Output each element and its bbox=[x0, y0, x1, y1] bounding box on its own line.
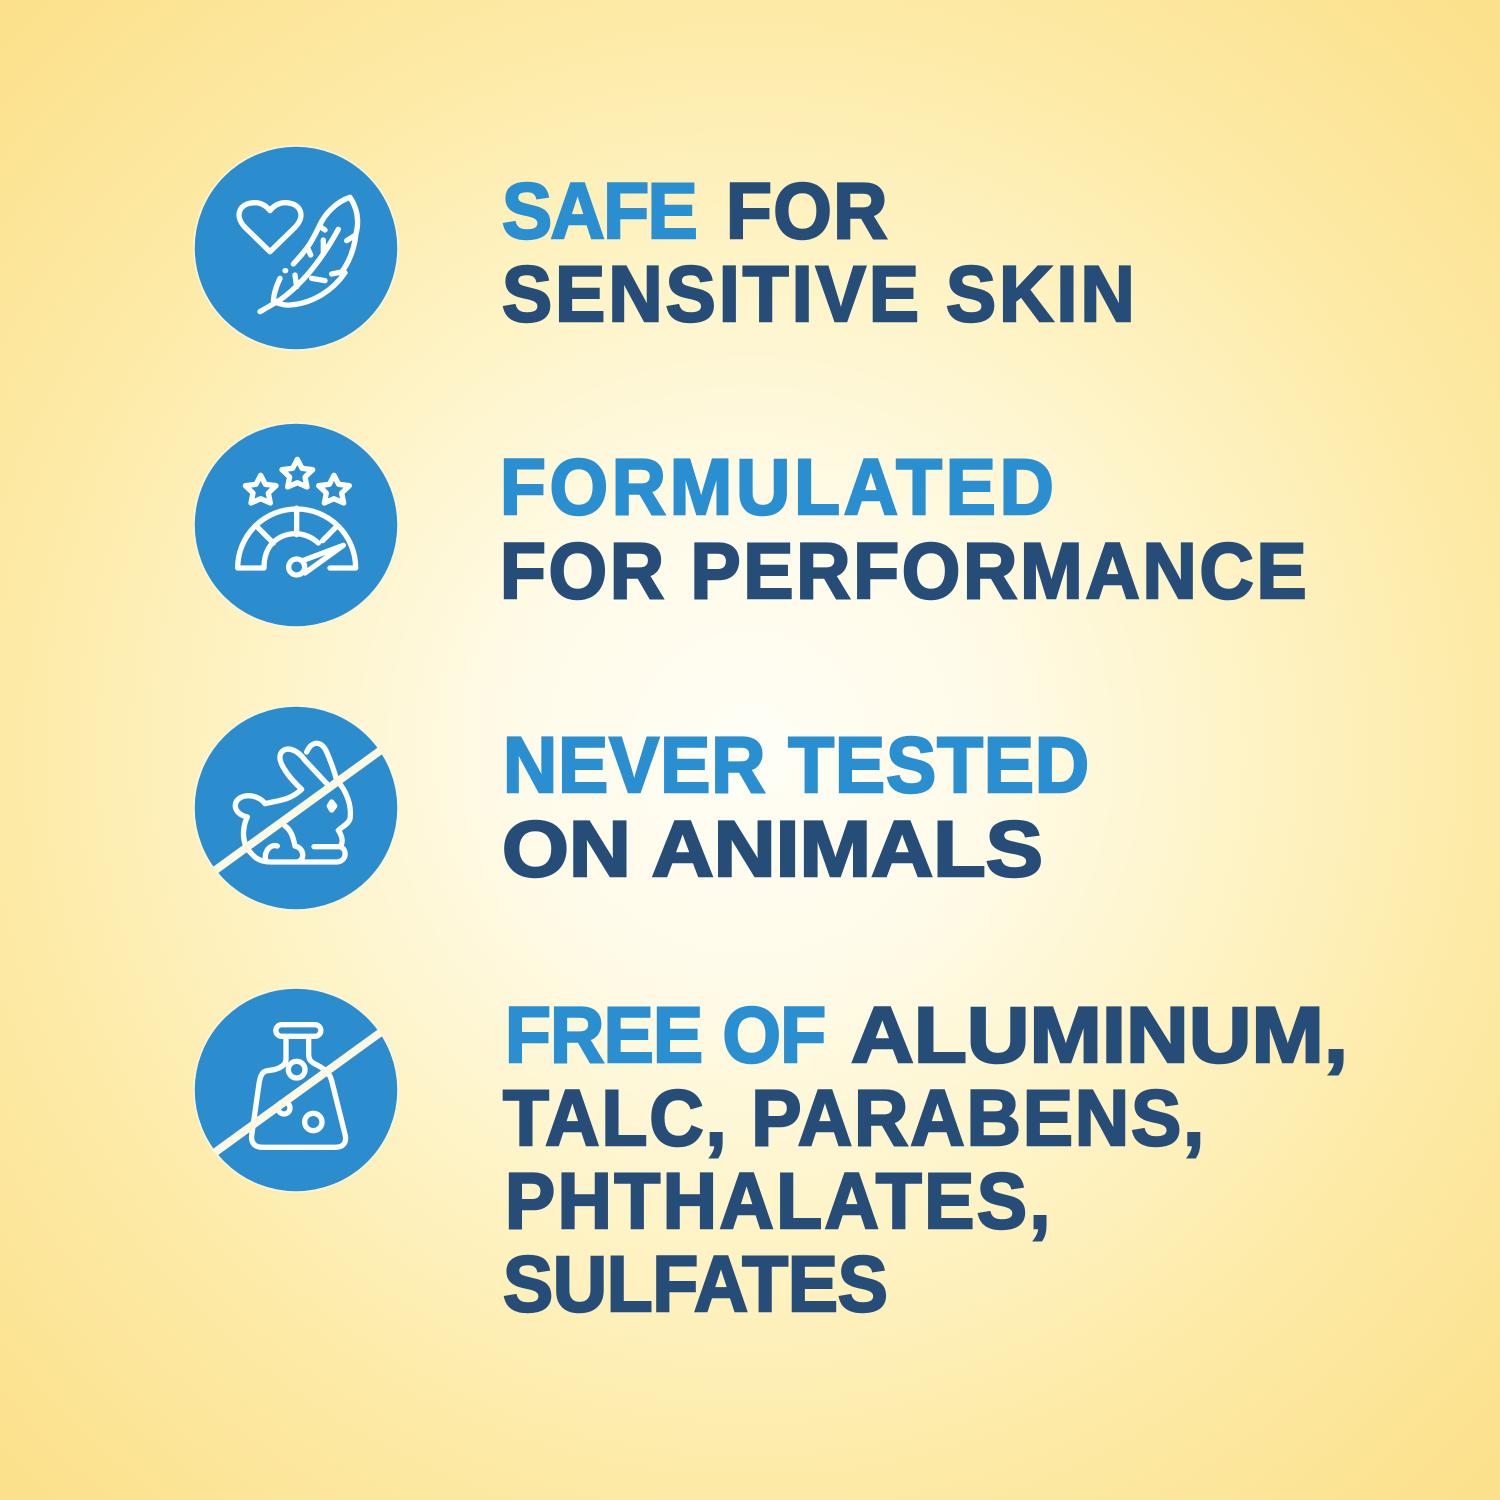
icon: crossed-out flask bbox=[194, 988, 398, 1192]
heading: safe for sensitive skin: FOR bbox=[726, 167, 888, 255]
heading: free of aluminum, talc, parabens, phthalates, sulfates bbox=[503, 990, 1348, 1328]
heading: never tested on animals bbox=[502, 721, 1089, 893]
gauge dial bbox=[238, 508, 356, 568]
heading: safe for sensitive skin: SENSITIVE SKIN bbox=[502, 250, 1135, 338]
crossing slash bbox=[215, 1032, 381, 1152]
heading: free of aluminum, talc, parabens, phthalates, sulfates: ALUMINUM, bbox=[851, 990, 1348, 1079]
three stars bbox=[245, 459, 349, 503]
heading: free of aluminum, talc, parabens, phthalates, sulfates: SULFATES bbox=[503, 1240, 888, 1328]
heading: never tested on animals: ON ANIMALS bbox=[502, 804, 1043, 893]
heading: safe for sensitive skin bbox=[502, 167, 1135, 338]
heading: formulated for performance: FORMULATED bbox=[500, 443, 1054, 531]
icon: heart and feather bbox=[194, 146, 398, 350]
crossing slash bbox=[215, 750, 381, 870]
icon: crossed-out rabbit bbox=[194, 706, 398, 910]
feather outline bbox=[260, 197, 358, 312]
heading: never tested on animals: NEVER TESTED bbox=[503, 721, 1089, 809]
heading: free of aluminum, talc, parabens, phthalates, sulfates: PHTHALATES, bbox=[505, 1157, 1050, 1245]
icon: stars and gauge bbox=[194, 423, 398, 627]
heading: free of aluminum, talc, parabens, phthalates, sulfates: FREE OF bbox=[505, 991, 826, 1079]
gauge needle bbox=[289, 545, 343, 575]
flask outline bbox=[252, 1025, 346, 1147]
heading: safe for sensitive skin: SAFE bbox=[502, 167, 698, 255]
rabbit outline bbox=[235, 743, 350, 862]
heading: formulated for performance bbox=[500, 443, 1307, 615]
heart outline bbox=[239, 203, 301, 252]
heading: formulated for performance: FOR PERFORMANCE bbox=[500, 527, 1307, 615]
heading: free of aluminum, talc, parabens, phthalates, sulfates: TALC, PARABENS, bbox=[503, 1074, 1204, 1162]
flask bubbles bbox=[278, 1061, 322, 1131]
